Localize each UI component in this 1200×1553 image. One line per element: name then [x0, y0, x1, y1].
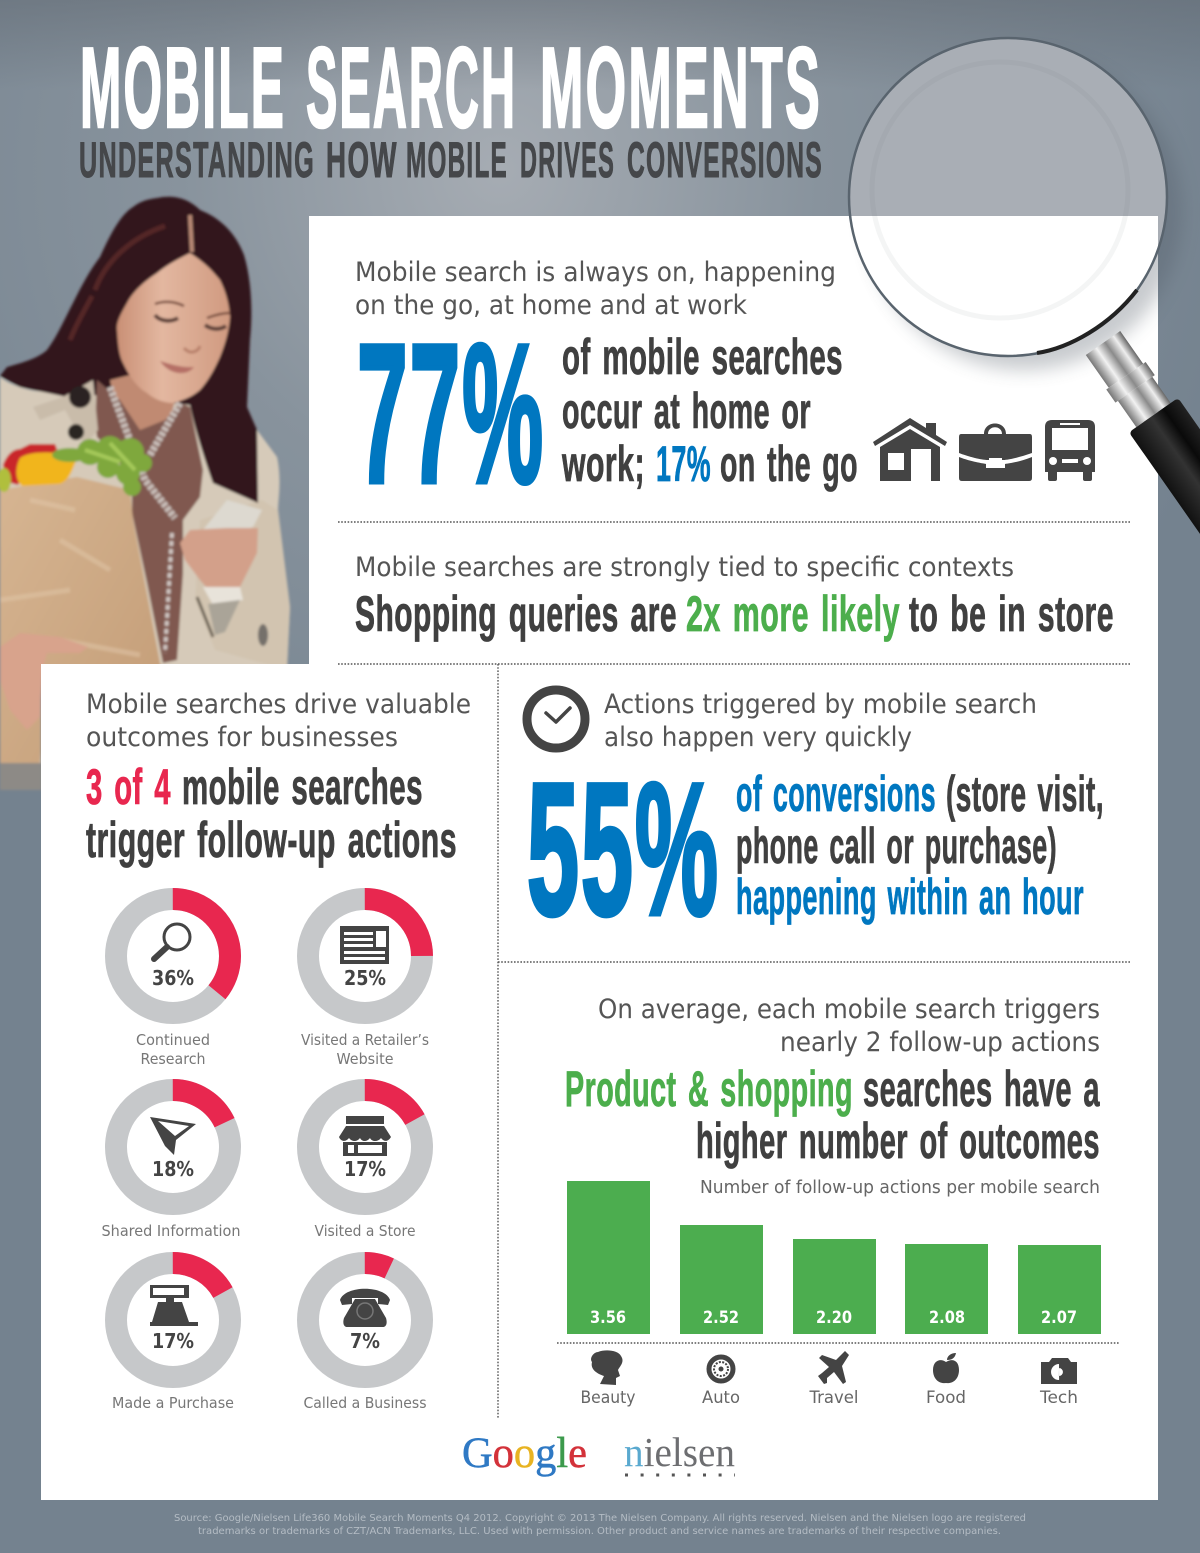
donut: made a purchase 17%	[112, 1263, 234, 1412]
bar chart: 2.07	[1041, 1308, 1077, 1328]
title: SEARCH	[306, 25, 517, 152]
panel: always on: 77%	[357, 303, 545, 524]
donut: shared information 18%: Shared Information	[102, 1222, 240, 1240]
icon: beauty	[591, 1350, 623, 1385]
donut: shared information 18%	[102, 1090, 240, 1240]
axis labels	[580, 1388, 1078, 1408]
footer source note	[174, 1513, 1026, 1537]
icon: clock	[527, 690, 585, 748]
text: 77% description: on the go	[720, 436, 858, 492]
photo: woman holding groceries and phone	[0, 197, 290, 790]
text: actions intro: Actions triggered by mobile search	[604, 689, 1037, 720]
donut: visited retailer's website 25%: Website	[336, 1050, 394, 1068]
panel: shopping queries	[355, 552, 1114, 642]
bar chart	[557, 1181, 1120, 1343]
text: 77% description: occur at home or	[562, 383, 811, 439]
subtitle: HOW	[326, 132, 398, 188]
white content panel	[41, 216, 1158, 1500]
heading: 3 of 4: trigger follow-up actions	[86, 812, 457, 868]
text: actions intro: also happen very quickly	[604, 722, 912, 753]
logo: nielsen: nielsen	[624, 1429, 735, 1475]
heading: shopping queries: 2x more likely	[686, 586, 900, 642]
donut: called a business 7%	[304, 1263, 427, 1412]
text: average intro	[598, 994, 1100, 1058]
subtitle	[79, 132, 823, 188]
donut: continued research 36%: Research	[140, 1050, 206, 1068]
donut: visited retailer's website 25%	[301, 899, 429, 1068]
text: outcomes intro: Mobile searches drive valuable	[86, 689, 471, 720]
text: 77% description	[561, 329, 858, 492]
text: outcomes intro: outcomes for businesses	[86, 722, 398, 753]
donut: visited a store 17%: Visited a Store	[314, 1222, 416, 1240]
text: 77% description: 17%	[656, 436, 711, 492]
icon: food apple	[933, 1353, 959, 1383]
chart title: Number of follow-up actions per mobile search	[700, 1177, 1100, 1198]
bar chart: 3.56	[590, 1308, 626, 1328]
icon: tech camera	[1041, 1358, 1077, 1384]
icon: briefcase	[959, 424, 1032, 481]
donut: shared information 18%: 18%	[152, 1157, 194, 1181]
title: MOBILE	[80, 25, 286, 152]
bar chart: 2.08	[929, 1308, 965, 1328]
text: CONVERSIONS	[627, 132, 823, 188]
icon: bus	[1045, 420, 1095, 481]
magnifying glass	[848, 36, 1200, 534]
text: 55% description	[736, 766, 1104, 925]
axis labels: Travel	[809, 1388, 858, 1408]
heading: 3 of 4: mobile searches	[182, 759, 423, 815]
axis labels: Beauty	[580, 1388, 636, 1408]
subtitle: MOBILE	[406, 132, 508, 188]
donut: continued research 36%: 36%	[152, 966, 194, 990]
footer source note: Source: Google/Nielsen Life360 Mobile Search Moments Q4 2012. Copyright © 2013 The Nielsen Company. All rights reserved. Nielsen and the Nielsen logo are registered	[174, 1513, 1026, 1524]
text: average intro: On average, each mobile search triggers	[598, 994, 1100, 1025]
panel: quick actions	[527, 689, 1104, 954]
text: actions intro	[604, 689, 1037, 753]
panel: follow-up actions	[557, 994, 1120, 1408]
text: always on intro: Mobile search is always on, happening	[355, 257, 836, 288]
footer source note: trademarks or trademarks of CZT/ACN Trademarks, LLC. Used with permission. Other product and service names are trademarks of their respective companies.	[198, 1526, 1001, 1537]
axis labels: Tech	[1039, 1388, 1078, 1408]
donut: made a purchase 17%: Made a Purchase	[112, 1394, 234, 1412]
text: context intro: Mobile searches are strongly tied to specific contexts	[355, 552, 1014, 583]
heading: product and shopping	[565, 1061, 1100, 1169]
title	[80, 25, 822, 152]
heading: shopping queries: Shopping queries are	[355, 586, 677, 642]
text: outcomes intro	[86, 689, 471, 753]
text: average intro: nearly 2 follow-up actions	[780, 1027, 1100, 1058]
donut: visited a store 17%	[308, 1090, 422, 1240]
donut: visited retailer's website 25%: 25%	[344, 966, 386, 990]
donut: called a business 7%: 7%	[350, 1329, 380, 1353]
axis labels: Auto	[702, 1388, 740, 1408]
panel: quick actions: 55%	[527, 744, 720, 954]
text: 55% description: of conversions	[736, 766, 936, 822]
text: always on intro: on the go, at home and at work	[355, 290, 747, 321]
panel: outcomes	[86, 689, 471, 1412]
heading: product and shopping: Product & shopping	[565, 1061, 853, 1117]
donut: visited a store 17%: 17%	[344, 1157, 386, 1181]
text: MOMENTS	[540, 25, 822, 152]
donut: continued research 36%: Continued	[136, 1031, 210, 1049]
icon: house	[873, 418, 947, 481]
donut: called a business 7%: Called a Business	[304, 1394, 427, 1412]
icon: auto wheel	[709, 1357, 733, 1381]
donut: visited retailer's website 25%: Visited a Retailer’s	[301, 1031, 429, 1049]
donut: made a purchase 17%: 17%	[152, 1329, 194, 1353]
axis labels: Food	[926, 1388, 966, 1408]
panel: always on	[355, 257, 1095, 524]
text: 77% description: of mobile searches	[562, 329, 843, 385]
donut: continued research 36%	[116, 899, 230, 1068]
subtitle: DRIVES	[520, 132, 615, 188]
heading: 3 of 4: 3 of 4	[86, 759, 171, 815]
subtitle: UNDERSTANDING	[79, 132, 315, 188]
bar chart: 2.52	[703, 1308, 739, 1328]
bar chart: 2.20	[816, 1308, 852, 1328]
text: always on intro	[355, 257, 836, 321]
text: 77% description: work;	[561, 436, 645, 492]
heading: 3 of 4	[86, 759, 457, 868]
logo: Google: Google	[462, 1430, 587, 1477]
icon: travel plane	[818, 1351, 849, 1384]
